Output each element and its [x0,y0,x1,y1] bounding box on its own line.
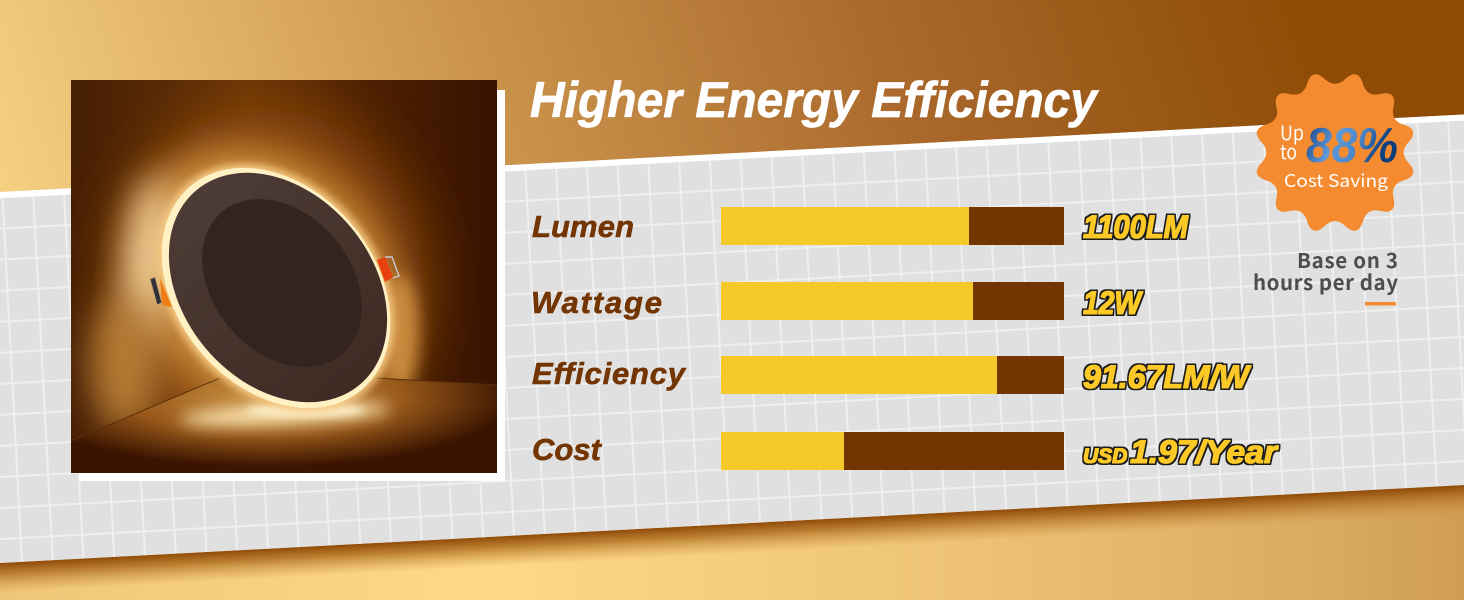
badge: up to 88% cost saving: Up [1280,117,1304,146]
row: cost: 1.97/Year [1130,434,1279,470]
panel top white edge [0,114,1464,198]
shadow band [0,484,1464,593]
floor lines [71,378,220,441]
row: lumen: Lumen [532,209,634,244]
photo: glowing round downlight [71,80,497,476]
lamp ring [162,168,390,408]
row: efficiency [532,356,1252,395]
lamp inner dark disc [202,199,362,367]
badge: up to 88% cost saving [1258,76,1412,229]
row: wattage: Wattage [531,285,662,320]
row: efficiency: 91.67LM/W [1083,359,1252,395]
lamp face [168,172,388,402]
row: cost [532,432,1279,470]
background: lower gradient [0,470,1464,600]
note: base on 3 hours per day [1253,244,1398,306]
note: base on 3 hours per day: Base on 3 [1297,244,1398,274]
badge: up to 88% cost saving: Cost Saving [1284,168,1388,193]
row: wattage [531,282,1143,321]
photo white backing [79,90,505,481]
row: wattage: 12W [1083,285,1143,321]
row: lumen: 1100LM [1083,209,1189,245]
note: base on 3 hours per day: hours per day [1253,266,1398,296]
background: upper gradient [0,0,1464,330]
badge: up to 88% cost saving: to [1280,136,1297,165]
right spring clip [377,257,399,282]
badge: up to 88% cost saving: 88% [1306,119,1398,173]
row: efficiency: Efficiency [532,356,687,391]
row: cost: Cost [532,432,603,467]
lamp glow [158,159,398,416]
left spring clip [150,277,172,307]
row: lumen [532,207,1189,245]
gray grid panel [0,114,1464,563]
row: cost: USD [1083,445,1127,468]
floor [71,378,497,473]
title: Higher Energy Efficiency [530,72,1099,128]
